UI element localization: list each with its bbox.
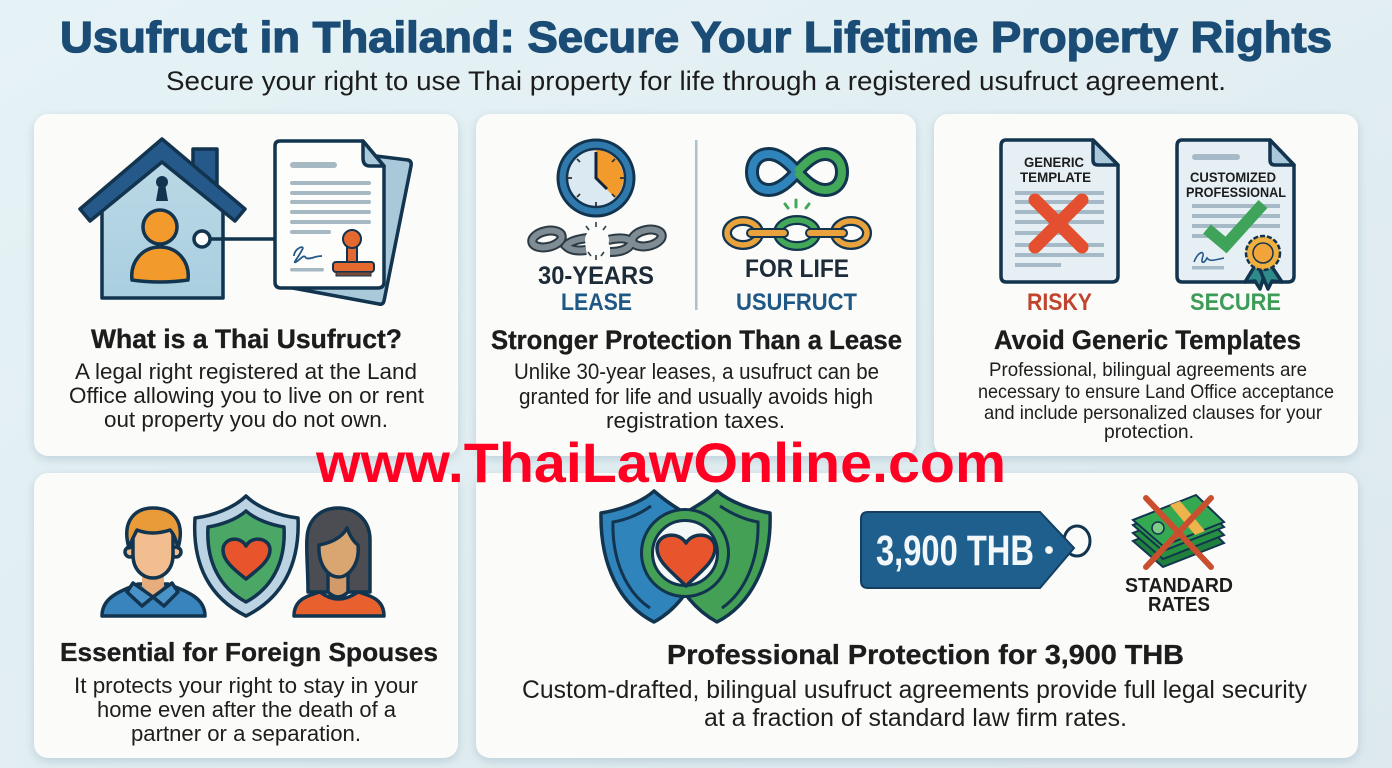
icon: woman [294,508,384,616]
icon: shield with heart [195,496,298,616]
label: standard rates [1125,575,1233,616]
heading: Avoid Generic Templates [994,325,1301,355]
icon: customized professional document [1177,140,1294,289]
icon: clock [558,140,634,216]
panel: what is a Thai usufruct [34,114,458,456]
icon: connector [194,231,276,247]
icon: man [102,508,205,616]
panel: professional protection [476,473,1358,758]
icon: signed document with stamp [275,141,384,288]
label: standard rates: RATES [1148,594,1210,616]
icon: strong chain [727,220,867,246]
label: lease: LEASE [561,289,632,316]
body text: out property you do not own. [104,407,388,432]
body text: necessary to ensure Land Office acceptance [978,381,1334,403]
icon: person [132,210,188,282]
icon: crossed-out money [1133,495,1224,567]
icon: price tag: 3,900 THB [876,527,1034,575]
body text: partner or a separation. [131,721,361,746]
body text: protection. [1104,421,1194,443]
icon: house with keyhole [80,139,245,298]
body text: Professional, bilingual agreements are [989,359,1307,381]
heading: Stronger Protection Than a Lease [491,325,902,355]
icon: infinity [752,154,842,190]
body text: at a fraction of standard law firm rates. [704,704,1127,732]
body text: and include personalized clauses for your [984,402,1322,424]
divider [695,140,698,310]
label: usufruct: USUFRUCT [736,289,857,316]
icon: sparks [785,200,809,208]
icon: generic template document: TEMPLATE [1020,169,1091,185]
panel: stronger protection than a lease [476,114,916,456]
icon: generic template document [1001,140,1118,282]
label: risky: RISKY [1027,289,1092,316]
label: secure: SECURE [1190,289,1281,316]
icon: customized professional document: CUSTOMIZED [1190,169,1276,185]
subtitle: Secure your right to use Thai property for life through a registered usufruct agreement. [166,66,1226,96]
panel: avoid generic templates [934,114,1358,456]
label: for life: FOR LIFE [745,255,849,283]
icon: customized professional document: PROFESSIONAL [1186,184,1286,200]
heading: Professional Protection for 3,900 THB [667,639,1184,670]
body text: A legal right registered at the Land [75,359,417,384]
heading: Essential for Foreign Spouses [60,637,438,667]
body text [69,359,424,432]
icon: price tag [861,512,1090,588]
body text: Unlike 30-year leases, a usufruct can be [514,359,879,384]
body text: home even after the death of a [97,697,397,722]
body text: registration taxes. [606,408,785,433]
icon: broken chain [531,222,663,260]
panel: essential for foreign spouses [34,473,458,758]
watermark url: www.ThaiLawOnline.com [315,431,1006,494]
heading: What is a Thai Usufruct? [91,324,402,354]
label: standard rates: STANDARD [1125,575,1233,597]
body text [522,676,1307,732]
icon: generic template document: GENERIC [1024,154,1084,170]
icon: back page [282,154,411,304]
body text [978,359,1334,443]
title: Usufruct in Thailand: Secure Your Lifetime Property Rights [60,13,1332,62]
body text [74,673,418,746]
body text: Office allowing you to live on or rent [69,383,424,408]
body text: It protects your right to stay in your [74,673,418,698]
body text: Custom-drafted, bilingual usufruct agreements provide full legal security [522,676,1307,704]
icon: overlapping shields with heart [601,491,770,622]
label: 30-years: 30-YEARS [538,262,654,290]
body text: granted for life and usually avoids high [519,384,873,409]
body text [514,359,879,433]
